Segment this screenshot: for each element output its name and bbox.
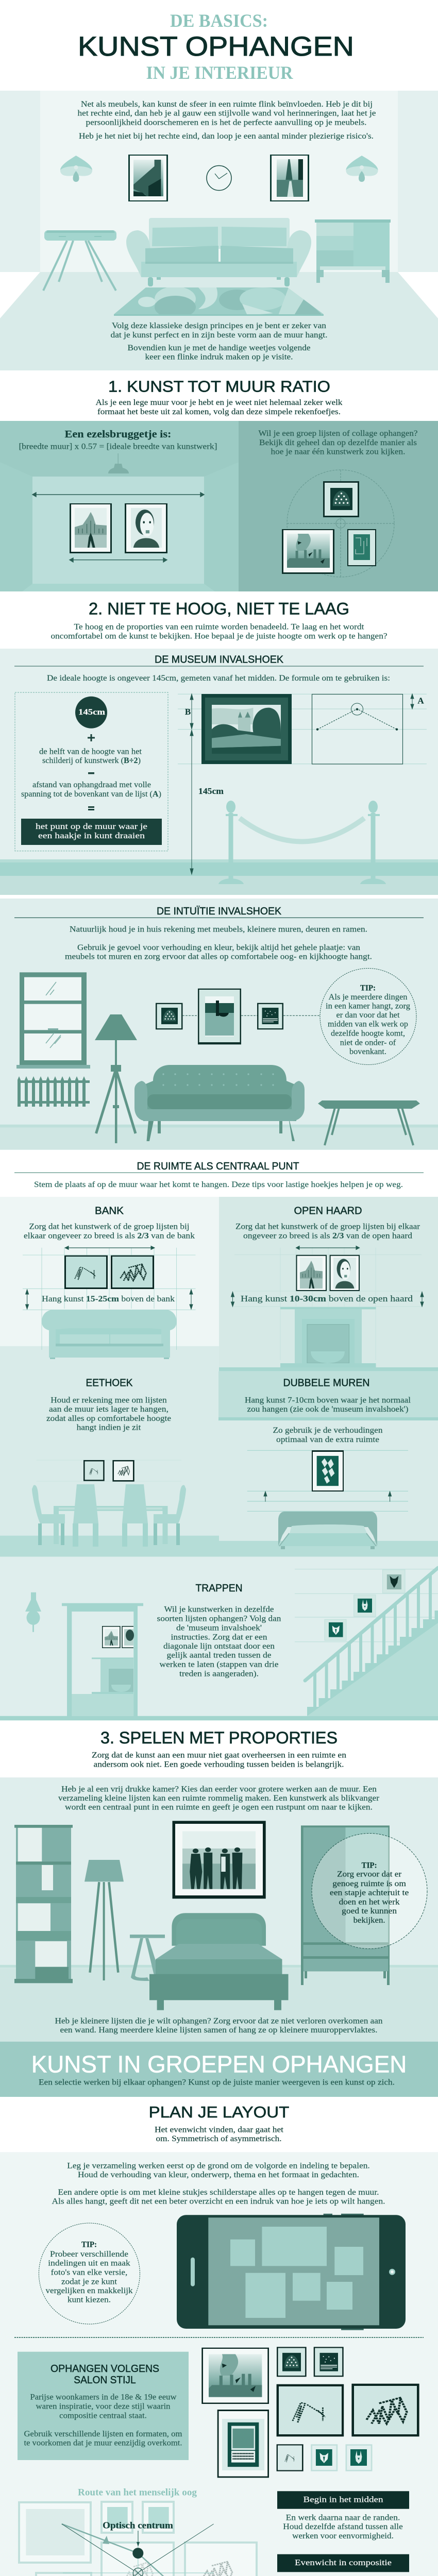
text: Bekijk dit geheel dan op dezelfde manier als	[259, 438, 417, 447]
icon: coffee table	[318, 1100, 420, 1145]
title: DE BASICS:	[170, 10, 268, 31]
tip bubble: goed te kunnen	[342, 1907, 397, 1916]
icon: fireplace	[280, 1307, 376, 1367]
panel: open haard	[218, 1197, 438, 1557]
icon: tablet	[177, 2214, 406, 2330]
tip bubble: bekijken.	[353, 1916, 385, 1925]
formula box: spanning tot de bovenkant van de lijst (A)	[21, 790, 161, 799]
artwork: blueprint	[347, 529, 376, 566]
callout: begin in het midden	[277, 2491, 409, 2540]
tip bubble: genoeg ruimte is om	[332, 1879, 406, 1888]
ghost frames	[19, 2502, 257, 2576]
text	[259, 429, 417, 456]
heading: section 1: 1. KUNST TOT MUUR RATIO	[108, 378, 330, 396]
heading: section 3	[92, 1728, 346, 1769]
tip bubble: TIP:	[362, 1861, 377, 1870]
panel: salon style: te voorkomen dat je muur eenzijdig overkomt.	[24, 2439, 182, 2448]
text: diagonale lijn ontstaat door een	[163, 1642, 275, 1651]
tip bubble: indelingen uit en maak	[48, 2259, 130, 2268]
artwork: factory	[282, 529, 334, 574]
icon: doorway with fireplace	[62, 1603, 143, 1716]
icon: sofa	[126, 218, 311, 286]
panel: salon style: Gebruik verschillende lijsten en formaten, om	[24, 2430, 182, 2438]
text: zodat alles op comfortabele hoogte	[46, 1414, 171, 1423]
text: aan de muur iets lager te hangen,	[49, 1405, 169, 1414]
text	[245, 1396, 411, 1444]
panel: bank	[0, 1197, 219, 1557]
heading: room as focus: Stem de plaats af op de muur waar het komt te hangen. Deze tips voor lastige hoekjes helpen je op weg.	[34, 1180, 403, 1189]
heading: TRAPPEN	[196, 1583, 242, 1594]
text: verzameling kleine lijsten kan een ruimte rommelig maken. Een kunstwerk als blikvanger	[58, 1794, 380, 1803]
tip bubble: Zorg ervoor dat er	[337, 1870, 402, 1879]
heading: section 3: andersom ook niet. Een goede verhouding tussen beiden is belangrijk.	[94, 1760, 344, 1769]
panel: group as one artwork	[239, 421, 438, 591]
heading: section 2: 2. NIET TE HOOG, NIET TE LAAG	[89, 600, 349, 618]
text: gelijk aantal treden tussen de	[167, 1651, 271, 1660]
text: meubels tot muren en zorg ervoor dat alles op comfortabele oog- en kijkhoogte hangt.	[65, 953, 372, 961]
diagram: wire	[312, 694, 403, 764]
icon: wall lamp left	[60, 156, 92, 182]
outro text: Volg deze klassieke design principes en je bent er zeker van	[112, 321, 326, 330]
icon: wardrobe	[301, 1825, 390, 1985]
text	[65, 925, 372, 961]
badge: 145cm: 145cm	[78, 708, 106, 717]
text: wordt een centraal punt in een ruimte en geeft je ogen een rustpunt om naar te kijken.	[65, 1803, 373, 1812]
badge: 145cm	[75, 697, 107, 728]
text	[235, 1223, 420, 1240]
outro text	[110, 321, 328, 362]
tip bubble: Als je meerdere dingen	[329, 993, 407, 1002]
heading: section 2	[50, 600, 388, 640]
intro text: Heb je het niet bij het rechte eind, dan loop je een aantal minder plezierige risico's.	[79, 132, 374, 141]
artwork: salon wall	[201, 2347, 419, 2478]
heading: section 1: formaat het beste uit zal komen, volg dan deze simpele rekenfoefjes.	[97, 408, 341, 416]
arrows: height	[231, 1292, 424, 1307]
text: de 'museum invalshoek'	[176, 1623, 262, 1632]
tip bubble: in een kamer hangt, zorg	[326, 1002, 410, 1011]
intro: De ideale hoogte is ongeveer 145cm, gemeten vanaf het midden. De formule om te gebruiken is:	[47, 674, 390, 683]
text: smaller frames	[55, 2016, 382, 2035]
artwork: framed landscape	[201, 694, 292, 764]
tip bubble: TIP:	[81, 2241, 97, 2249]
panel: salon style	[18, 2352, 189, 2460]
heading: DUBBELE MUREN	[283, 1378, 370, 1389]
artwork: dots	[156, 1003, 182, 1029]
heading: section 2: oncomfortabel om de kunst te bekijken. Hoe bepaal je de juiste hoogte om werk op te hangen?	[50, 632, 388, 640]
icon: rug	[114, 287, 324, 316]
icon: side table	[43, 230, 116, 291]
tip bubble: kunt kiezen.	[68, 2296, 111, 2304]
heading: EETHOEK	[86, 1378, 133, 1389]
text	[157, 1605, 281, 1678]
icon: wall lamp right	[346, 156, 378, 182]
heading: section 3: Zorg dat de kunst aan een muur niet gaat overheersen in een ruimte en	[92, 1751, 346, 1760]
tip bubble: dezelfde hoogte komt,	[331, 1029, 405, 1038]
text: werken te laten (stappen van drie	[160, 1660, 278, 1669]
tip bubble: niet de onder- of	[340, 1038, 396, 1047]
text: Zo gebruik je de verhoudingen	[273, 1426, 382, 1435]
tip bubble: vergelijken en makkelijk	[45, 2286, 133, 2295]
tip bubble: foto's van elke versie,	[51, 2268, 127, 2277]
text: elkaar ongeveer zo breed is als 2/3 van de bank	[24, 1231, 195, 1240]
panel: single artwork ratio	[0, 421, 239, 591]
grid lines	[234, 1248, 422, 1360]
callout: evenwicht: Evenwicht in compositie	[295, 2558, 392, 2567]
artwork: dots variant	[257, 1003, 283, 1029]
heading: DE MUSEUM INVALSHOEK	[155, 654, 284, 666]
intro text: Net als meubels, kan kunst de sfeer in een ruimte flink beïnvloeden. Heb je dit bij	[81, 100, 373, 109]
label: optical centre	[103, 2520, 173, 2547]
tip bubble: er dan voor dat het	[336, 1011, 400, 1020]
text: Leg je verzameling werken eerst op de grond om de volgorde en indeling te bepalen.	[67, 2161, 370, 2170]
arrow: wall width	[32, 493, 204, 497]
text: Wil je kunstwerken in dezelfde	[164, 1605, 274, 1614]
result box	[21, 819, 162, 845]
icon: bookcase	[14, 1825, 73, 1983]
formula box: de helft van de hoogte van het	[39, 747, 142, 756]
tip bubble: TIP:	[360, 984, 376, 992]
banner: kunst in groepen	[0, 2042, 438, 2097]
chart: eye route diagram	[19, 2502, 257, 2576]
heading: plan je layout: PLAN JE LAYOUT	[149, 2103, 289, 2121]
tip bubble: bovenkant.	[349, 1047, 386, 1056]
panel: dubbele muren	[245, 1378, 411, 1549]
guide lines	[247, 1450, 408, 1511]
icon: staircase	[305, 1568, 438, 1716]
heading: section 1: Als je een lege muur voor je hebt en je weet niet helemaal zeker welk	[96, 398, 342, 407]
text: instructies. Zorg dat er een	[171, 1633, 267, 1641]
tip bubble: Probeer verschillende	[50, 2250, 128, 2259]
artwork: large band photo	[172, 1821, 266, 1899]
artwork: poster	[198, 989, 241, 1044]
callout: begin in het midden: Begin in het midden	[303, 2496, 383, 2504]
label: 145cm: 145cm	[198, 786, 224, 796]
heading: room as focus: DE RUIMTE ALS CENTRAAL PUNT	[137, 1161, 299, 1172]
artwork: bridge	[128, 155, 168, 201]
connector: equal height	[182, 1015, 321, 1016]
heading: section 3: 3. SPELEN MET PROPORTIES	[100, 1728, 338, 1747]
intro text: persoonlijkheid doorschemeren en is het de perfecte aanvulling op je meubels.	[86, 118, 367, 127]
label: B: B	[185, 707, 191, 717]
artwork: eiffel	[270, 155, 309, 201]
arrow: width	[296, 1246, 360, 1250]
arrows: height	[26, 1290, 193, 1309]
icon: clock	[207, 166, 231, 191]
icon: tufted sofa	[134, 1065, 305, 1141]
panel: salon style: SALON STIJL	[74, 2375, 136, 2386]
heading: plan je layout	[149, 2103, 289, 2143]
callout: begin in het midden: werken voor eenvormigheid.	[292, 2532, 394, 2540]
text: Heb je al een vrij drukke kamer? Kies dan eerder voor grotere werken aan de muur. Een	[61, 1785, 377, 1793]
artwork: mansion	[296, 1255, 327, 1291]
artwork: dots	[323, 481, 359, 517]
icon: small sofa	[278, 1512, 377, 1549]
panel: salon style: compositie centraal staat.	[59, 2411, 147, 2420]
heading: room as focus	[14, 1161, 424, 1189]
text	[46, 1396, 171, 1432]
text: Wil je een groep lijsten of collage ophangen?	[259, 429, 417, 438]
panel: museum angle	[0, 649, 438, 895]
banner: kunst in groepen: Een selectie werken bij elkaar ophangen? Kunst op de juiste manier weergeven is een kunst op zich.	[39, 2078, 395, 2087]
text: Zorg dat het kunstwerk of de groep lijsten bij	[29, 1223, 190, 1231]
formula box: schilderij of kunstwerk (B÷2)	[42, 756, 141, 765]
outro text: dat je kunst perfect en in zijn beste vorm aan de muur hangt.	[110, 331, 328, 340]
icon: rope barrier	[218, 801, 386, 884]
text: soorten lijsten ophangen? Volg dan	[157, 1615, 281, 1623]
grid lines	[23, 1248, 196, 1350]
text	[24, 1223, 195, 1240]
outro text: keer een flinke indruk maken op je visite.	[145, 353, 293, 362]
arrows: B and 145cm	[190, 694, 193, 874]
panel: salon style: waren inspiratie, voor deze stijl waarin	[36, 2402, 170, 2411]
intro text: het rechte eind, dan heb je al gauw een stijlvolle wand vol herinneringen, laat het je	[77, 109, 376, 117]
text: Hang kunst 7-10cm boven waar je het normaal	[245, 1396, 411, 1404]
icon: ceiling lamp	[108, 453, 129, 473]
formula	[19, 429, 217, 451]
artwork: sketch right	[111, 1256, 154, 1289]
measure text: Hang kunst 10-30cm boven de open haard	[241, 1294, 413, 1303]
text: Zorg dat het kunstwerk of de groep lijsten bij elkaar	[235, 1223, 420, 1231]
text: smaller frames: een wand. Hang meerdere kleine lijsten samen of hang ze op kleinere muuroppervlaktes.	[60, 2026, 377, 2035]
panel: proportions room	[0, 1777, 438, 2042]
tip bubble	[39, 2223, 140, 2324]
tip bubble: zodat je ze kunt	[61, 2277, 117, 2286]
heading: BANK	[95, 1206, 124, 1217]
panel: layout	[0, 2152, 438, 2576]
arrow: A: A	[417, 696, 424, 706]
icon: bed	[149, 1913, 289, 2010]
panel: salon style: OPHANGEN VOLGENS	[50, 2363, 159, 2375]
artwork: pattern	[312, 1450, 344, 1492]
tip bubble: een stapje achteruit te	[330, 1889, 409, 1897]
text: smaller frames: Heb je kleinere lijsten die je wilt ophangen? Zorg ervoor dat ze niet verloren overkomen aan	[55, 2016, 382, 2025]
text: Een andere optie is om met kleine stukjes schilderstape alles op te hangen tegen de muur.	[58, 2188, 379, 2197]
heading: section 2: Te hoog en de proporties van een ruimte worden benadeeld. Te laag en het wordt	[74, 623, 364, 632]
panel: eethoek	[0, 1378, 219, 1557]
text: hoe je naar één kunstwerk zou kijken.	[271, 448, 405, 456]
formula box	[15, 692, 168, 851]
heading: OPEN HAARD	[294, 1206, 362, 1217]
tip bubble: doen en het werk	[339, 1897, 400, 1906]
title	[78, 10, 354, 83]
formula: [breedte muur] x 0.57 = [ideale breedte van kunstwerk]	[19, 443, 217, 451]
arrows: up	[264, 1492, 392, 1502]
heading: eye route: Route van het menselijk oog	[78, 2487, 197, 2498]
text	[52, 2161, 385, 2206]
artwork: small frames	[83, 1460, 134, 1482]
title: KUNST OPHANGEN	[78, 31, 354, 62]
icon: side table	[130, 1935, 165, 1981]
tip bubble	[312, 1833, 427, 1948]
result box: een haakje in kunt draaien	[38, 832, 145, 840]
result box: het punt op de muur waar je	[36, 822, 147, 831]
artwork: sketch left	[64, 1256, 108, 1289]
banner: kunst in groepen: KUNST IN GROEPEN OPHANGEN	[31, 2050, 407, 2077]
icon: chesterfield sofa	[42, 1310, 177, 1359]
icon: cabinet	[315, 219, 391, 283]
intro text	[77, 100, 376, 141]
measure text: Hang kunst 15-25cm boven de bank	[42, 1295, 175, 1303]
text: Houd er rekening mee om lijsten	[50, 1396, 167, 1404]
text: treden is aangeraden).	[179, 1669, 259, 1678]
heading: plan je layout: om. Symmetrisch of asymmetrisch.	[156, 2134, 281, 2143]
panel: salon style: Parijse woonkamers in de 18e & 19e eeuw	[30, 2393, 177, 2402]
panel: trappen	[0, 1557, 438, 1720]
formula box: afstand van ophangdraad met volle	[32, 781, 151, 789]
guide lines	[178, 694, 427, 764]
tip bubble	[320, 969, 416, 1064]
label: optical centre: Optisch centrum	[103, 2520, 173, 2530]
outro text: Bovendien kun je met de handige weetjes volgende	[128, 344, 310, 352]
text: hangt indien je zit	[77, 1423, 141, 1432]
title: IN JE INTERIEUR	[146, 62, 293, 83]
icon: floor lamp	[85, 1860, 124, 1980]
artwork: stair frames	[325, 1570, 405, 1640]
panel: intro room	[0, 91, 438, 370]
text: Natuurlijk houd je in huis rekening met meubels, kleinere muren, deuren en ramen.	[70, 925, 367, 934]
formula: Een ezelsbruggetje is:	[65, 429, 171, 440]
text: Als alles hangt, geeft dit net een beter overzicht en een indruk van hoe je iets op wilt hangen.	[52, 2197, 385, 2206]
artwork: mansion	[70, 503, 112, 553]
heading: section 1	[96, 378, 342, 416]
guide circle	[287, 470, 394, 577]
icon: wall lamp	[25, 1592, 41, 1632]
icon: dining set	[32, 1484, 186, 1547]
artwork: portrait	[125, 503, 167, 553]
icon: window	[16, 972, 90, 1069]
artwork: portrait	[330, 1255, 360, 1291]
callout: begin in het midden: Houd dezelfde afstand tussen alle	[283, 2522, 403, 2531]
text: ongeveer zo breed is als 2/3 van de open haard	[243, 1231, 412, 1240]
arrow: artwork width	[70, 558, 167, 562]
heading: plan je layout: Het evenwicht vinden, daar gaat het	[155, 2125, 284, 2134]
text: zou hangen (zie ook de 'museum invalshoek')	[247, 1405, 408, 1414]
heading: DE INTUÏTIE INVALSHOEK	[157, 906, 282, 917]
text: Houd de verhouding van kleur, onderwerp, thema en het formaat in gedachten.	[78, 2171, 359, 2179]
arrow: A	[411, 694, 424, 709]
panel: intuition angle	[0, 899, 438, 1150]
text: Gebruik je gevoel voor verhouding en kleur, bekijk altijd het gehele plaatje: van	[77, 943, 360, 952]
callout: begin in het midden: En werk daarna naar de randen.	[286, 2513, 400, 2522]
text: optimaal van de extra ruimte	[276, 1435, 379, 1444]
text	[58, 1785, 380, 1812]
arrow: width	[65, 1246, 155, 1250]
callout: evenwicht	[269, 2554, 417, 2576]
tip bubble: midden van elk werk op	[328, 1020, 408, 1029]
icon: radiator	[18, 1076, 90, 1107]
icon: tripod lamp	[95, 1014, 137, 1143]
floor	[0, 1536, 219, 1557]
